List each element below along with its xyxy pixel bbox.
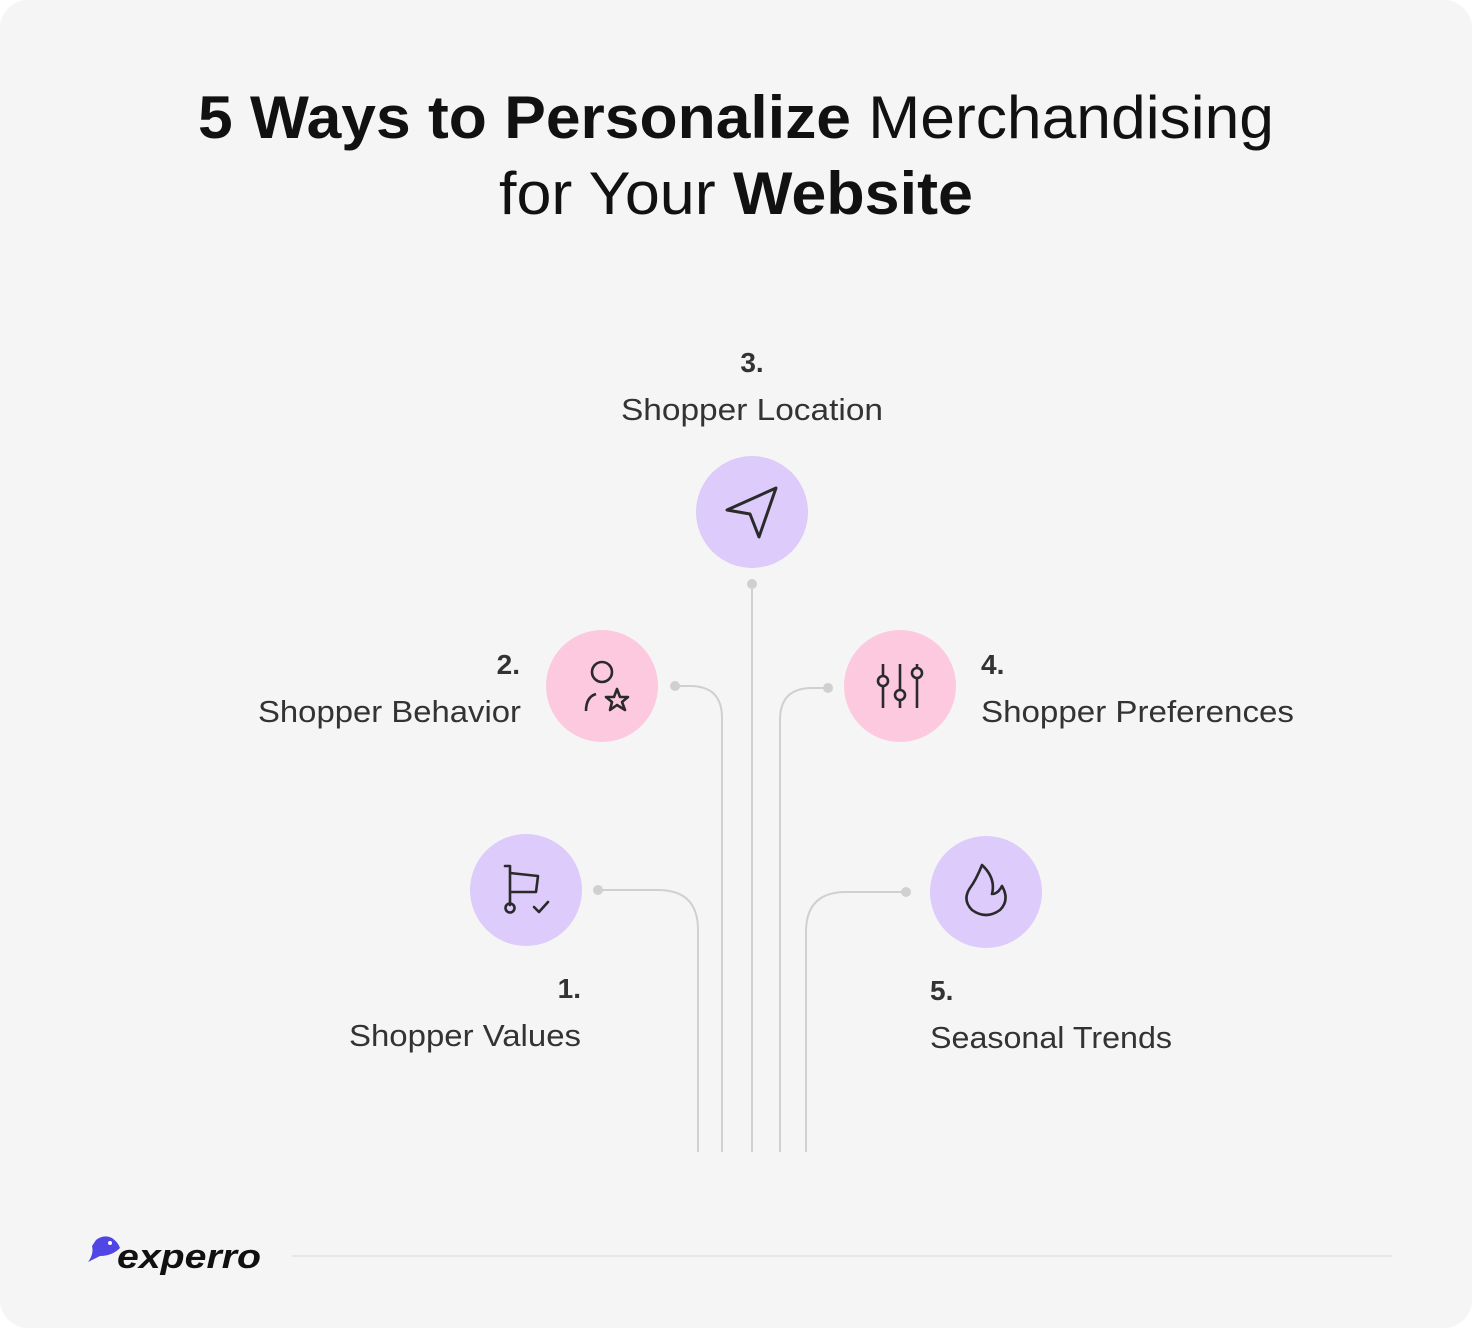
- item 4: Shopper Preferences: [844, 630, 1294, 742]
- icon: navigation arrow: [727, 488, 776, 537]
- item 3: Shopper Location: Shopper Location: [621, 392, 883, 427]
- icon: sliders: [878, 664, 922, 708]
- item 3: Shopper Location: 3.: [740, 347, 764, 378]
- item 2: Shopper Behavior: Shopper Behavior: [258, 694, 521, 729]
- title: [198, 84, 1274, 227]
- footer divider: [292, 1255, 1392, 1257]
- item 5: Seasonal Trends: 5.: [930, 975, 953, 1006]
- icon: flame: [966, 865, 1006, 915]
- item 5: Seasonal Trends: Seasonal Trends: [930, 1020, 1172, 1055]
- title: for Your Website: [499, 160, 973, 227]
- item 2: Shopper Behavior: [258, 630, 658, 742]
- title: 5 Ways to Personalize Merchandising: [198, 84, 1274, 151]
- item 4: Shopper Preferences: 4.: [981, 649, 1004, 680]
- connector lines: [593, 579, 911, 1152]
- item 3: Shopper Location: [621, 347, 883, 568]
- item 1: Shopper Values: 1.: [558, 973, 581, 1004]
- icon: user star: [586, 662, 628, 711]
- item 5: Seasonal Trends: [930, 836, 1172, 1055]
- item 4: Shopper Preferences: Shopper Preferences: [981, 694, 1294, 729]
- item 1: Shopper Values: Shopper Values: [349, 1018, 581, 1053]
- logo: experro: experro: [117, 1238, 261, 1276]
- icon: cart check: [505, 866, 548, 912]
- logo: experro: [88, 1236, 261, 1276]
- item 2: Shopper Behavior: 2.: [497, 649, 520, 680]
- item 1: Shopper Values: [349, 834, 582, 1053]
